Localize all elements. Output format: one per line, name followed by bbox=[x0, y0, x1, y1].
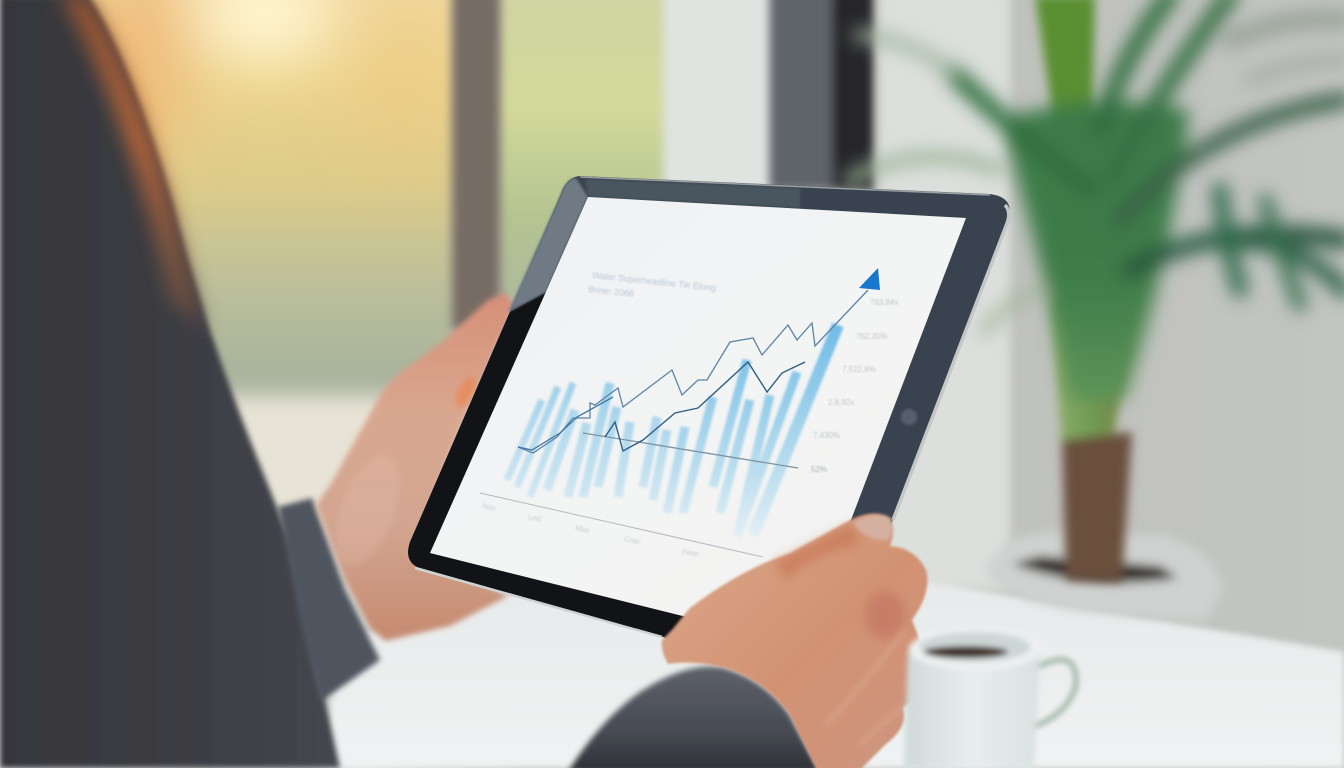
chart x labels: Mas bbox=[575, 523, 591, 535]
camera button bbox=[901, 409, 917, 425]
chart value labels: 7.430% bbox=[813, 431, 840, 440]
plant pot bbox=[985, 532, 1222, 622]
trend line early bbox=[518, 397, 613, 450]
warm rim light on shoulder bbox=[40, 0, 205, 330]
chart x labels bbox=[482, 501, 700, 558]
tablet body bbox=[408, 176, 1010, 690]
background: bright window left bbox=[60, 0, 460, 528]
chart value labels: 762.20% bbox=[856, 332, 888, 341]
person: torso bbox=[0, 0, 340, 768]
person: right hand bbox=[662, 513, 927, 768]
trend line upper bbox=[518, 290, 868, 453]
tablet top bezel tone bbox=[585, 179, 800, 208]
palm highlight bbox=[324, 447, 412, 573]
tablet silver edge bbox=[893, 205, 1009, 520]
background: pale wall panel bbox=[878, 0, 1010, 590]
background: table surface bbox=[320, 582, 1344, 768]
chart x axis bbox=[480, 493, 763, 557]
chart title: Water Superheadline Tie Elong bbox=[592, 270, 716, 293]
chart value labels: 2.8,92x bbox=[828, 398, 854, 407]
chart value labels bbox=[811, 298, 898, 474]
thumbnail bbox=[853, 515, 892, 540]
bar chart bbox=[507, 325, 838, 537]
tablet screen bbox=[430, 197, 966, 646]
chart x labels: Fean bbox=[682, 547, 700, 558]
tablet dark lower bezel bbox=[408, 292, 820, 690]
background: window pane centre bbox=[498, 0, 772, 300]
tablet upper left bezel bbox=[508, 178, 588, 312]
tablet bottom edge bbox=[415, 568, 662, 637]
knuckle blush bbox=[865, 591, 905, 639]
chart x labels: Nov bbox=[482, 501, 497, 513]
chart value labels: 52% bbox=[811, 465, 827, 474]
chart baseline bbox=[583, 433, 798, 468]
arrow head bbox=[859, 268, 880, 290]
person: right sleeve bbox=[568, 666, 820, 768]
finger highlights bbox=[825, 630, 905, 745]
coffee cup bbox=[904, 628, 1076, 768]
plant fronds bbox=[850, 0, 1344, 400]
thumb red tone bbox=[775, 524, 860, 580]
chart value labels: 7,522.8% bbox=[842, 365, 876, 374]
chart value labels: 763.84x bbox=[870, 298, 898, 307]
person: left sleeve cuff bbox=[278, 498, 380, 702]
chart x labels: Cran bbox=[624, 534, 641, 546]
thumb warm glow bbox=[451, 373, 481, 411]
background: window frame posts bbox=[452, 0, 874, 330]
background: sun glow bbox=[90, 0, 450, 160]
plant stem bbox=[1035, 0, 1135, 582]
coffee bbox=[924, 646, 1008, 658]
chart x labels: Lnd bbox=[528, 512, 542, 524]
person: left hand bbox=[316, 293, 515, 641]
tablet top edge highlight bbox=[580, 177, 990, 195]
chart title: Brine: 2066 bbox=[588, 284, 635, 299]
trend line lower bbox=[605, 362, 805, 451]
